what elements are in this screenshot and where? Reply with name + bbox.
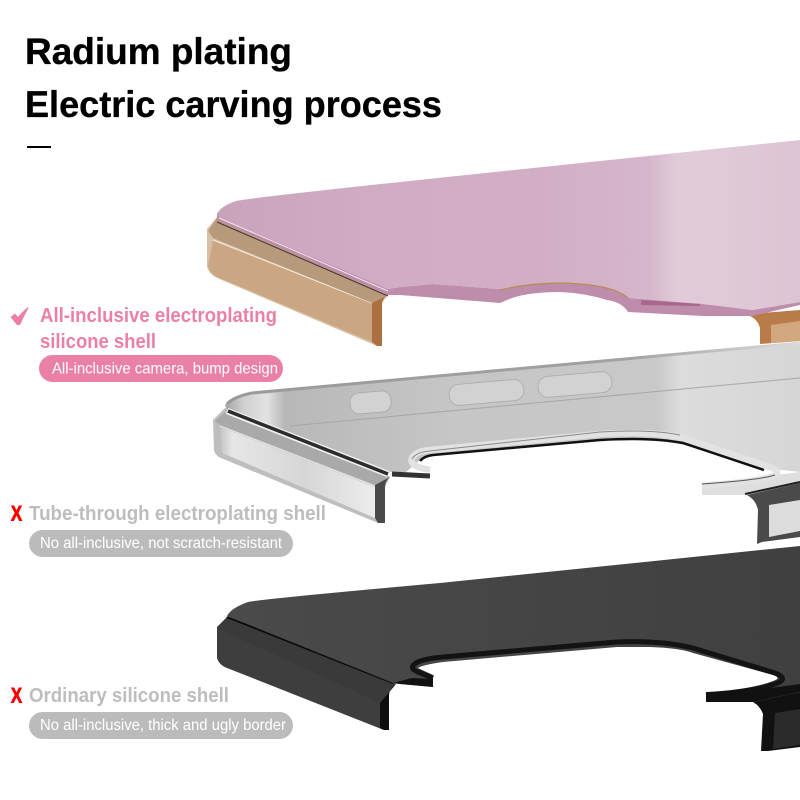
clear top rim [227,343,800,404]
gold right side frame [750,310,800,344]
title accent dash [27,146,51,148]
option 2 pill: No all-inclusive, not scratch-resistant [40,535,283,552]
pink electroplated shell [207,140,800,346]
camera notch slot [641,300,700,306]
option 1: all-inclusive electroplating [10,305,283,382]
chrome camera cutout rim [392,431,777,486]
option 2 heading: Tube-through electroplating shell [29,503,326,525]
option 2 pill [29,530,293,557]
gold camera rim [500,283,628,298]
black camera cutout rim [412,642,782,695]
option 3: ordinary silicone [11,684,293,739]
black lip tabs [393,678,800,702]
plate highlight edge [219,218,388,291]
title [25,31,442,125]
clear inner ridge [290,378,800,426]
option 1 pill: All-inclusive camera, bump design [52,360,278,378]
option 1 heading [40,305,277,353]
clear transparent shell [213,343,800,544]
icon: red x: X [11,502,22,526]
option 3 heading: Ordinary silicone shell [29,685,229,707]
option 1 pill [39,355,283,382]
button slots [349,371,613,415]
pink plate thickness [217,213,800,316]
option 1 heading: All-inclusive electroplating [40,305,277,327]
clear left side frame [213,408,390,523]
clear right side frame [702,472,800,544]
dark gasket left [227,411,388,474]
gold left side frame [207,217,388,346]
option 2: tube-through electroplating [11,502,326,557]
pink plate top [217,140,800,310]
black plate top [227,546,800,702]
option 3 pill: No all-inclusive, thick and ugly border [40,717,287,734]
black left side frame [217,617,396,730]
icon: red x: X [11,684,22,708]
title: Electric carving process [25,84,442,125]
icon: check mark [10,307,28,325]
title: Radium plating [25,31,292,72]
clear shell interior [225,343,800,472]
option 3 pill [29,712,293,739]
black silicone shell [217,546,800,751]
black right side frame [753,692,800,751]
option 1 heading: silicone shell [40,331,156,353]
